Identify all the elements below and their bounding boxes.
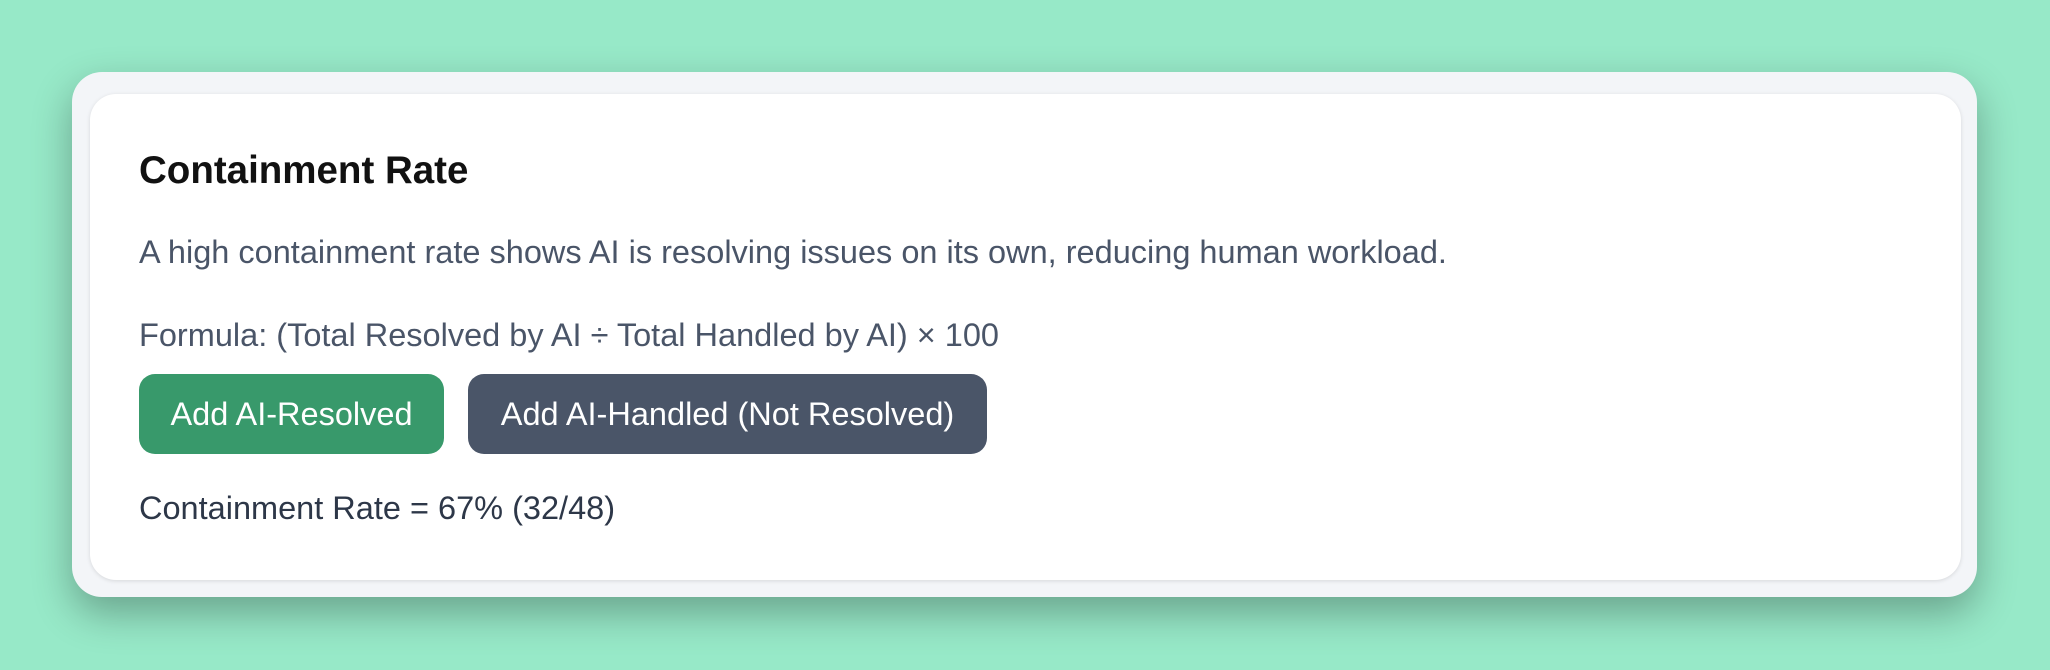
text block: formula: Formula: (Total Resolved by AI ÷ Total Handled by AI) × 100 [139,317,999,353]
text block: result: Containment Rate = 67% (32/48) [139,490,615,526]
text block: description: A high containment rate shows AI is resolving issues on its own, reducing human workload. [139,234,1447,270]
button: add AI-resolved: Add AI-Resolved [170,396,413,432]
panel: inner card [90,94,1961,580]
button: add AI-resolved [139,374,444,454]
button: add AI-handled [468,374,987,454]
panel: outer card [72,72,1977,597]
title: Containment Rate [139,149,468,192]
button: add AI-handled: Add AI-Handled (Not Resolved) [501,396,954,432]
